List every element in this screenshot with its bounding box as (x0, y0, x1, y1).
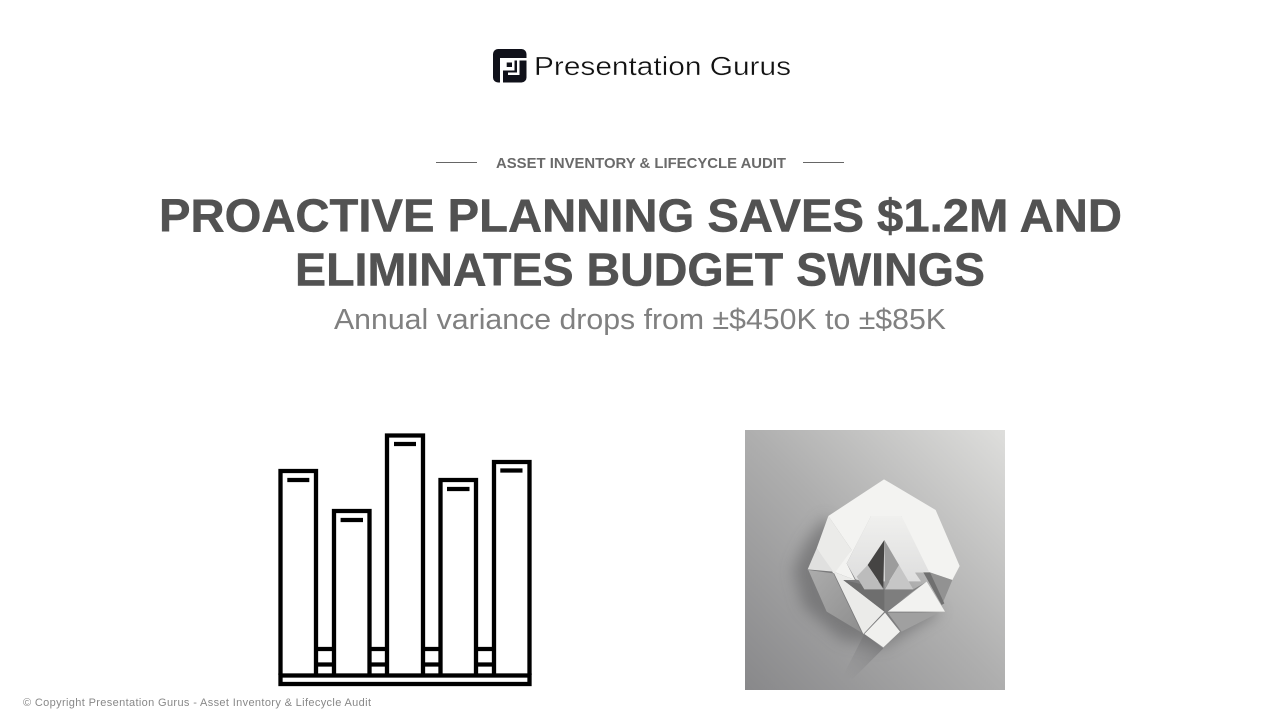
gem facets (808, 479, 960, 647)
long shadow (853, 636, 883, 668)
footer copyright: © Copyright Presentation Gurus - Asset Inventory & Lifecycle Audit (23, 697, 371, 709)
logo wordmark: Presentation Gurus (534, 51, 791, 81)
subtitle: Annual variance drops from ±$450K to ±$85K (334, 304, 947, 336)
bar 3 (387, 436, 423, 675)
soft shadow (793, 517, 942, 647)
title (159, 190, 1122, 296)
icon: bar chart outline (280, 436, 530, 684)
title: PROACTIVE PLANNING SAVES $1.2M AND (159, 190, 1122, 242)
connectors between bars (318, 649, 492, 664)
value ticks (287, 444, 522, 520)
baseline (280, 676, 530, 684)
image background (745, 430, 1005, 690)
icon: logo mark (493, 49, 526, 82)
bar 4 (440, 480, 476, 675)
title: ELIMINATES BUDGET SWINGS (295, 244, 985, 296)
bar 1 (280, 471, 316, 675)
bar 5 (494, 462, 530, 675)
image: origami gem illustration (745, 430, 1005, 690)
eyebrow label: ASSET INVENTORY & LIFECYCLE AUDIT (496, 155, 786, 172)
logo: Presentation Gurus (493, 49, 791, 82)
bar 2 (334, 511, 370, 675)
